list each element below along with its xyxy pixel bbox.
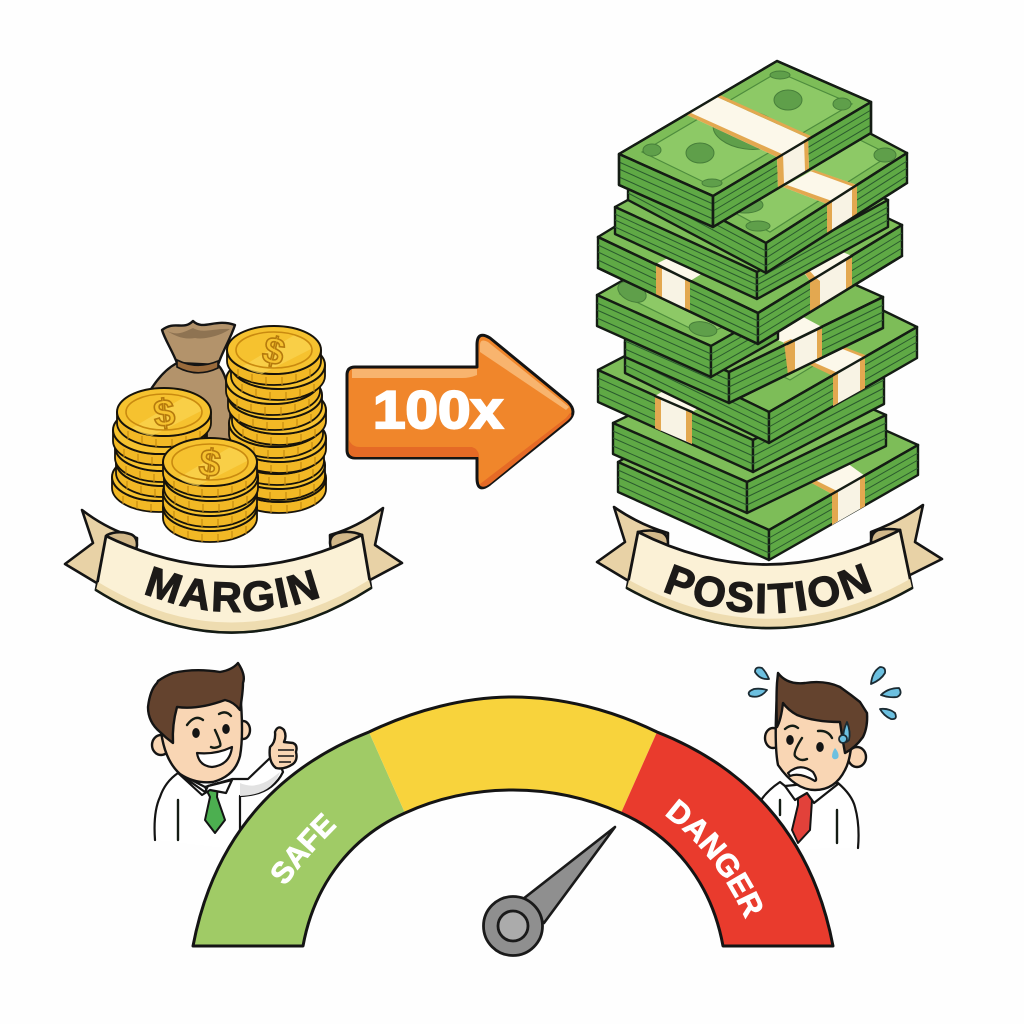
banner: MARGIN: MARGIN (144, 566, 320, 613)
character: happy man with thumbs up (148, 663, 297, 850)
gauge (192, 696, 834, 957)
arrow: 100x: 100x (373, 381, 504, 440)
hair (776, 673, 867, 753)
coin stack: left (112, 388, 211, 512)
gauge segment: danger (red) (621, 732, 833, 946)
eyes, brows, nose, mouth (785, 726, 832, 781)
shirt and arm (155, 758, 283, 850)
tie (205, 783, 225, 833)
collar (785, 780, 838, 803)
sweat drops (749, 667, 901, 759)
label: DANGER: DANGER (665, 798, 762, 920)
bundle 7 (625, 257, 917, 443)
icon: money bag (140, 321, 235, 470)
face (776, 690, 852, 790)
coins and money bag illustration (112, 321, 326, 542)
label: SAFE: SAFE (271, 812, 337, 884)
shirt (755, 782, 859, 850)
ears (152, 735, 170, 755)
stack of cash bundles (597, 61, 918, 560)
coin stack: front: $ (196, 442, 223, 486)
bundle 8 (598, 302, 884, 472)
character: worried man sweating (749, 667, 901, 850)
coin stack: left: $ (152, 392, 177, 436)
bundle 6 (625, 251, 883, 403)
gauge segment: caution (yellow) (369, 697, 657, 813)
ears (765, 728, 781, 748)
bundle 2 (628, 80, 907, 273)
bundle 9 (613, 356, 886, 513)
bundle 10 (618, 377, 918, 560)
coin stack: right (226, 326, 326, 513)
coin stack: right: $ (258, 329, 289, 375)
eyes, brows, nose, smile (187, 712, 232, 767)
bundle 3 (615, 135, 888, 299)
bundle 1 (top) (619, 61, 871, 227)
banner: POSITION (596, 504, 944, 630)
tie (792, 792, 812, 843)
hair (148, 663, 244, 743)
thumb and fist (270, 727, 297, 768)
bundle 5 (597, 257, 778, 377)
banner: POSITION: POSITION (664, 563, 872, 614)
collar (178, 773, 232, 795)
bundle 4 (598, 149, 902, 344)
arrow: 100x (347, 335, 573, 488)
banner: MARGIN (64, 506, 404, 634)
gauge outline (193, 697, 833, 946)
coin stack: front (163, 438, 258, 542)
face (160, 690, 242, 782)
needle (484, 827, 615, 956)
gauge segment: safe (green) (193, 732, 405, 946)
